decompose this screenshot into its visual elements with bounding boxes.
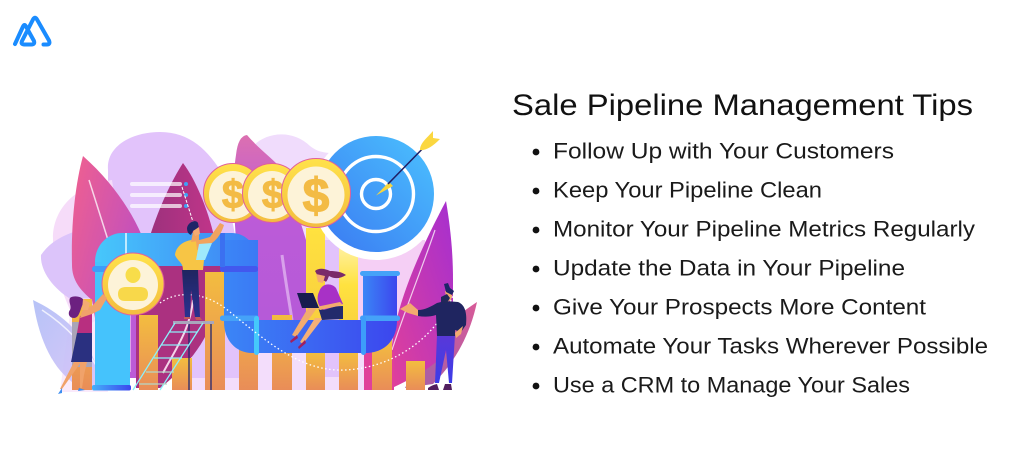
leaf: magenta right [392,201,453,388]
coin: dollar 1: $ [222,173,244,217]
tip 7: Use a CRM to Manage Your Sales [553,372,910,398]
coin: dollar 3: $ [303,170,330,223]
leaf veins [42,180,435,372]
tip 2: Keep Your Pipeline Clean [553,178,822,202]
ladder [133,321,214,390]
person: man on ladder [175,221,224,320]
coin: dollar 2: $ [262,173,284,217]
leaf: pink left [72,156,142,318]
leaf: purple centre-right [234,135,306,353]
pipes [92,233,257,390]
leaf: pale blue left [33,300,95,390]
tip 3: Monitor Your Pipeline Metrics Regularly [553,216,976,242]
bars [72,228,425,390]
leaf: purple beside left pipe [128,312,138,378]
leaf: far right pink [405,302,477,388]
person: man right [400,283,466,390]
right pipe [220,233,400,355]
logo [15,18,49,44]
text lines decoration [130,182,194,225]
leaf: dark magenta centre [138,163,217,268]
background blobs [41,132,430,392]
illustration: sales pipeline [33,131,477,394]
target [312,131,440,260]
coin: dollar 2 [242,164,302,222]
coin: dollar 1 [204,164,262,222]
coin: dollar 3 [282,158,350,228]
person: woman left [58,294,107,394]
heading: Sale Pipeline Management Tips [512,89,973,122]
arrow [376,131,440,196]
tip 1: Follow Up with Your Customers [553,138,894,164]
bars in front of magenta leaf [139,272,225,390]
leaf: dark magenta lower body [136,266,222,388]
person: woman with laptop [290,269,346,349]
tip 4: Update the Data in Your Pipeline [553,256,905,280]
coin: person [102,253,164,315]
dotted curve [160,290,455,370]
tips list [533,138,988,398]
tip 6: Automate Your Tasks Wherever Possible [553,334,988,358]
tip 5: Give Your Prospects More Content [553,294,927,320]
pale vein on magenta leaf [163,300,193,373]
leaf: magenta lower stub [364,352,394,390]
